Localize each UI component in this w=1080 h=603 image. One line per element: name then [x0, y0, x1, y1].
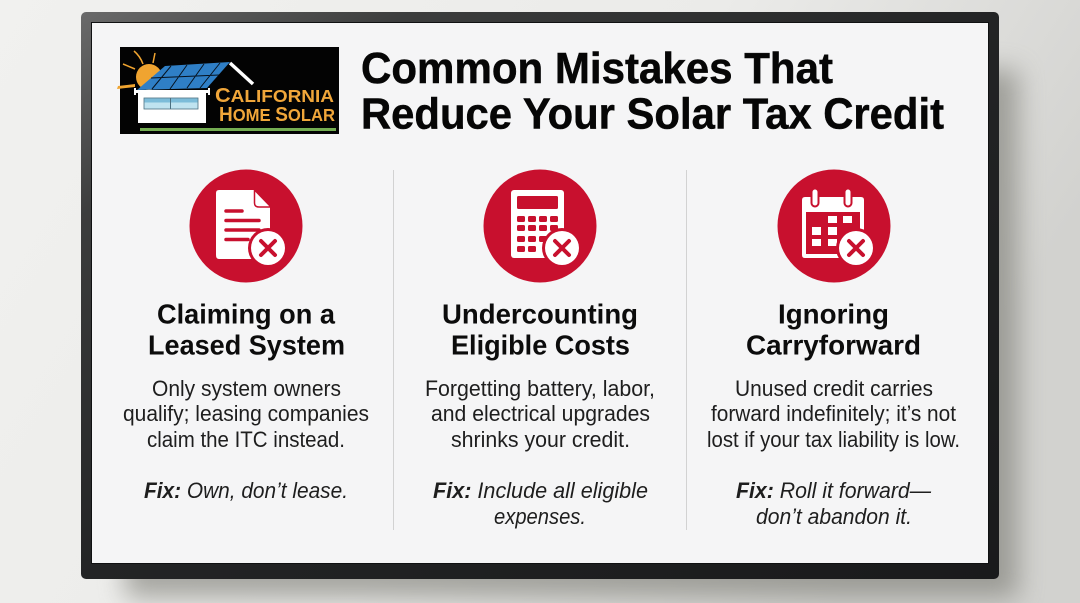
fix: [736, 478, 932, 529]
heading: Undercounting: [442, 298, 638, 330]
icon: house: [134, 63, 253, 123]
icon: document with x: [190, 170, 302, 282]
fix: Fix: Own, don’t lease.: [144, 478, 348, 503]
fix: don’t abandon it.: [756, 504, 912, 529]
fix: expenses.: [494, 504, 586, 529]
body text: forward indefinitely; it’s not: [711, 401, 957, 426]
icon: solar panels roof: [137, 62, 230, 90]
body text: Only system owners: [152, 376, 341, 401]
body text: lost if your tax liability is low.: [707, 427, 960, 452]
fix: [433, 478, 648, 529]
logo text: HOME SOLAR: [219, 104, 335, 126]
logo text: CALIFORNIA: [215, 85, 334, 107]
body text: [425, 376, 655, 452]
icon: calculator with x: [484, 170, 596, 282]
monitor frame: [81, 12, 999, 579]
body text: qualify; leasing companies: [123, 401, 369, 426]
logo text: [215, 85, 335, 126]
panel: undercounting eligible costs: [425, 170, 655, 529]
fix: Fix: Include all eligible: [433, 478, 648, 503]
heading: [746, 298, 921, 360]
logo: California Home Solar: [117, 47, 339, 134]
heading: [148, 298, 345, 360]
body text: [707, 376, 960, 452]
heading: Ignoring: [778, 298, 889, 330]
panel: ignoring carryforward: [707, 170, 960, 529]
icon: calendar with x: [778, 170, 890, 282]
panel: claiming on a leased system: [123, 170, 369, 503]
title: Reduce Your Solar Tax Credit: [361, 90, 944, 138]
icon: sun: [117, 51, 162, 90]
fix: Fix: Roll it forward—: [736, 478, 932, 503]
title: Common Mistakes That: [361, 44, 833, 93]
heading: Eligible Costs: [451, 330, 630, 360]
title: [361, 44, 944, 138]
heading: Carryforward: [746, 330, 921, 360]
body text: [123, 376, 369, 452]
body text: shrinks your credit.: [451, 427, 630, 452]
body text: Unused credit carries: [735, 376, 933, 401]
body text: Forgetting battery, labor,: [425, 376, 655, 401]
heading: Claiming on a: [157, 298, 335, 330]
body text: and electrical upgrades: [431, 401, 650, 426]
heading: [442, 298, 638, 360]
column dividers: [393, 170, 687, 530]
heading: Leased System: [148, 330, 345, 360]
body text: claim the ITC instead.: [147, 427, 345, 452]
